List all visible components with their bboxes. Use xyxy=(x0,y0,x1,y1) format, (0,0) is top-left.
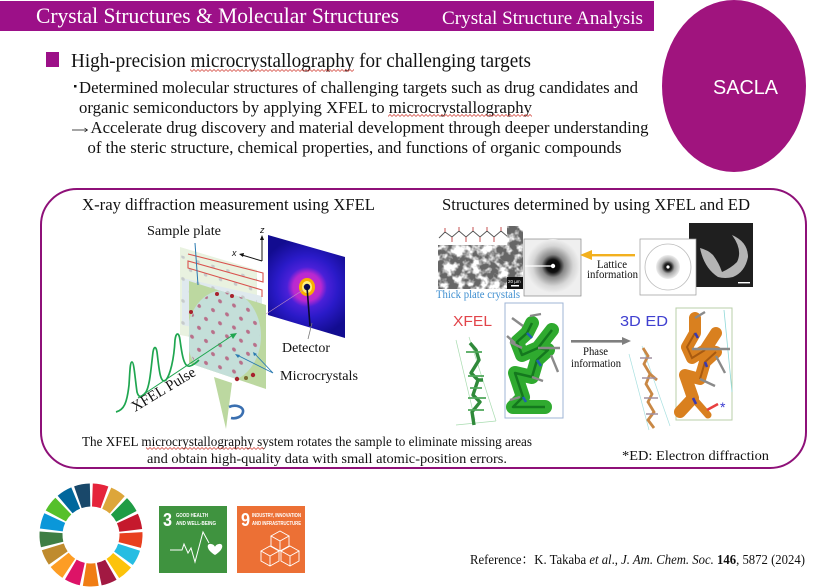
title bar xyxy=(0,1,654,31)
subtitle: Crystal Structure Analysis xyxy=(442,9,643,29)
lattice arrow xyxy=(580,250,635,260)
diagram: crystals and diffraction xyxy=(436,223,753,430)
XFEL diffraction pattern xyxy=(524,239,581,296)
detector xyxy=(266,235,345,338)
chemical structure xyxy=(439,227,521,243)
main title: Crystal Structures & Molecular Structures xyxy=(36,3,399,28)
SDG 3 tile: GOOD HEALTH xyxy=(176,513,208,519)
3D ED label: 3D ED xyxy=(620,314,668,330)
caption: and obtain high-quality data with small atomic-position errors. xyxy=(147,452,507,467)
detector label: Detector xyxy=(282,340,331,355)
SDG 9 tile: 9 xyxy=(241,510,250,530)
caption xyxy=(82,435,532,467)
main panel xyxy=(41,189,806,468)
summary text: Accelerate drug discovery and material development through deeper understanding xyxy=(90,118,649,137)
XFEL density close-up xyxy=(505,303,563,418)
electron micrograph xyxy=(689,223,753,287)
summary text: of the steric structure, chemical properties, and functions of organic compounds xyxy=(88,138,622,157)
ED diffraction pattern xyxy=(640,239,696,295)
summary text: Determined molecular structures of challenging targets such as drug candidates and xyxy=(79,78,638,97)
phase label: Phase xyxy=(583,346,608,358)
detector label xyxy=(282,323,331,355)
phase label: information xyxy=(571,358,621,370)
caption: The XFEL microcrystallography system rotates the sample to eliminate missing areas xyxy=(82,435,532,450)
diagram: XFEL diffraction setup xyxy=(116,223,358,429)
rotation arrow xyxy=(229,406,243,418)
microcrystals label xyxy=(235,352,358,383)
SDG 9 tile: INDUSTRY, INNOVATION xyxy=(252,513,301,519)
scan path xyxy=(188,254,263,297)
XFEL pulse: XFEL Pulse xyxy=(129,364,199,415)
SDG 3 tile: AND WELL-BEING xyxy=(176,521,216,527)
phase label xyxy=(571,346,621,370)
footnote: *ED: Electron diffraction xyxy=(622,448,769,463)
XFEL whole molecule xyxy=(456,337,496,425)
summary text xyxy=(72,78,649,157)
3D ED whole molecule xyxy=(629,346,670,430)
lattice label: information xyxy=(587,269,638,281)
sample plate label: Sample plate xyxy=(147,223,221,238)
axes xyxy=(231,225,265,261)
sample plate label xyxy=(147,223,221,285)
SDG 9 tile xyxy=(237,506,305,573)
SACLA badge xyxy=(662,0,806,172)
SACLA badge: SACLA xyxy=(713,77,779,99)
lattice label xyxy=(587,259,638,281)
lattice label: Lattice xyxy=(597,259,627,271)
section heading: High-precision microcrystallography for challenging targets xyxy=(71,51,531,72)
rear sample plate xyxy=(180,247,262,350)
XFEL label: XFEL xyxy=(453,314,492,330)
SDG wheel xyxy=(50,494,132,576)
axes: z xyxy=(259,225,265,235)
microcrystals label: Microcrystals xyxy=(280,368,358,383)
ED density close-up xyxy=(676,308,732,420)
SDG 3 tile xyxy=(159,506,227,573)
XFEL pulse xyxy=(116,333,237,415)
SDG 9 tile: AND INFRASTRUCTURE xyxy=(252,521,301,527)
heading: XFEL measurement: X-ray diffraction measurement using XFEL xyxy=(82,195,375,214)
summary text: organic semiconductors by applying XFEL to microcrystallography xyxy=(79,98,532,117)
axes: x xyxy=(231,248,237,258)
crystal micrograph: 20 µm xyxy=(508,279,521,284)
crystal micrograph xyxy=(438,226,523,289)
phase arrow xyxy=(571,337,631,345)
heading: structures: Structures determined by using XFEL and ED xyxy=(442,195,750,214)
ED density close-up: * xyxy=(720,399,726,415)
SDG 3 tile: 3 xyxy=(163,510,172,530)
crystal label: Thick plate crystals xyxy=(436,289,520,301)
reference: Reference：K. Takaba et al., J. Am. Chem. Soc. 146, 5872 (2024) xyxy=(470,552,805,567)
front sample plate xyxy=(187,281,266,429)
